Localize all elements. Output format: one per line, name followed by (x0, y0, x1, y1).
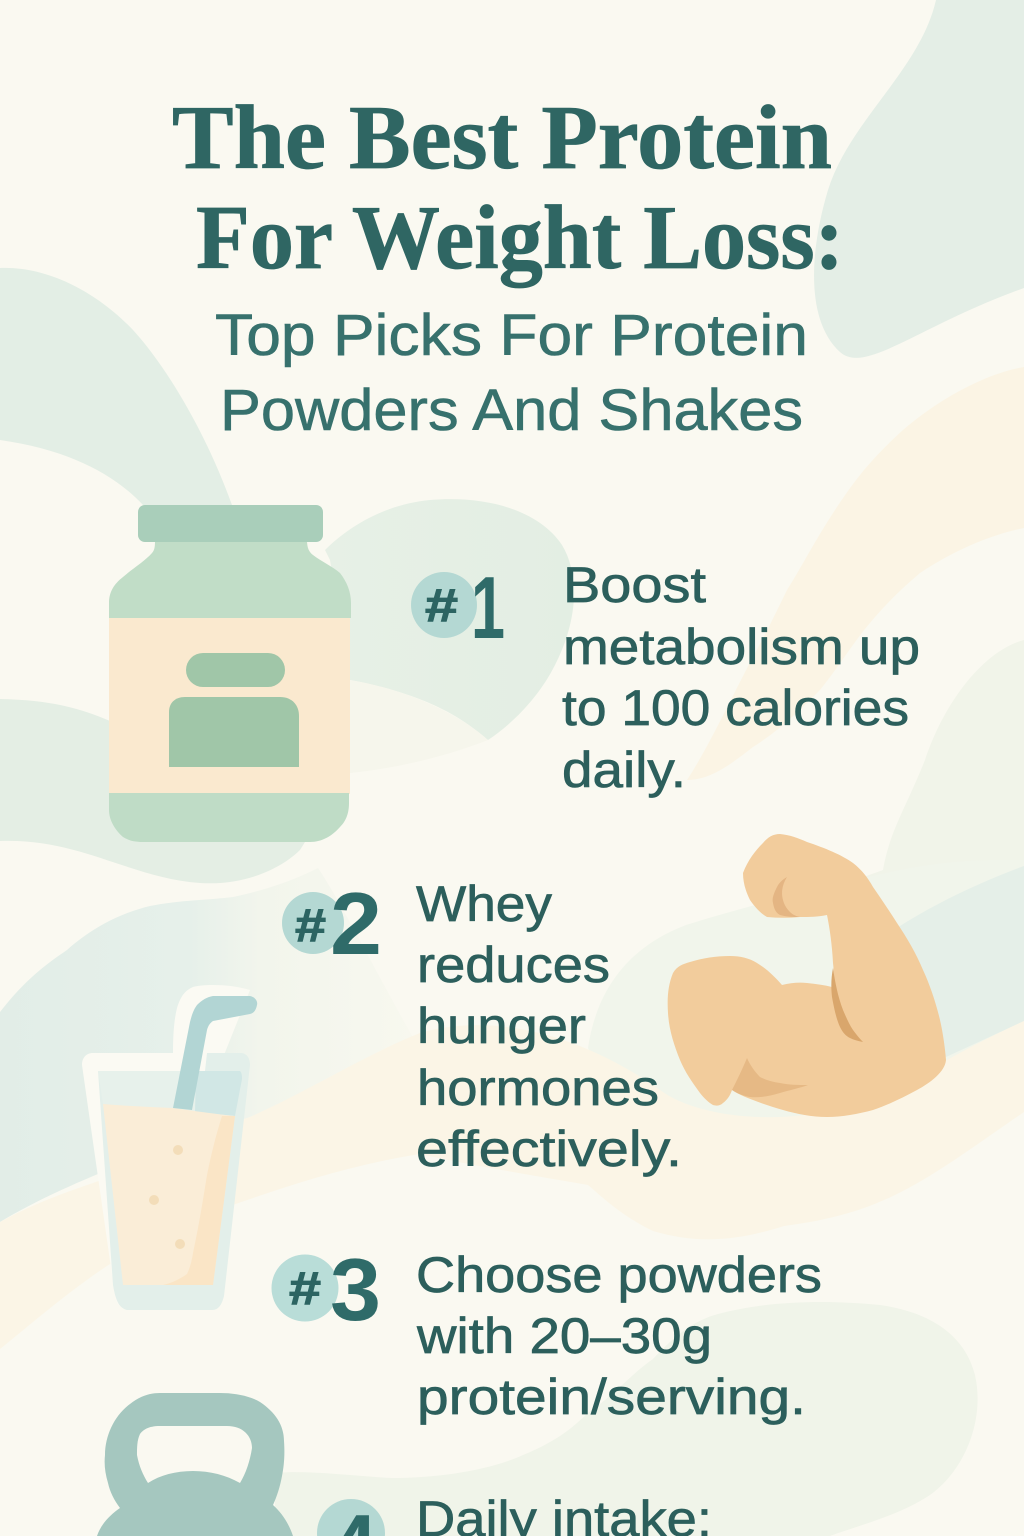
text: item 1: Boost (563, 557, 706, 613)
text: item 2: reduces (417, 937, 610, 993)
icon: protein jar (109, 505, 351, 842)
icon: shake glass (82, 985, 257, 1310)
icon: kettlebell (97, 1393, 293, 1536)
rank badge 3 (272, 1240, 381, 1339)
text: item 2: Whey (416, 876, 552, 932)
subtitle: Powders And Shakes (220, 378, 803, 443)
text: item 1 (562, 557, 920, 798)
text: item 3 (416, 1247, 822, 1425)
text: item 3: protein/serving. (417, 1369, 806, 1425)
rank badge 3: # (289, 1262, 321, 1314)
text: item 1: to 100 calories (562, 680, 909, 736)
title: The Best Protein (172, 87, 832, 188)
icon: flexed arm (668, 834, 946, 1117)
text: item 3: with 20–30g (416, 1308, 712, 1364)
rank badge 2 (282, 874, 382, 973)
title: For Weight Loss: (196, 187, 844, 288)
text: item 2: hunger (417, 998, 586, 1054)
text: item 1: metabolism up (563, 619, 920, 675)
title (172, 87, 844, 288)
rank badge 1 (411, 558, 505, 657)
rank badge 3: 3 (330, 1240, 381, 1339)
rank badge 1: # (425, 579, 458, 631)
text: item 3: Choose powders (416, 1247, 822, 1303)
rank badge 2: 2 (330, 874, 382, 973)
text: item 2: hormones (417, 1060, 659, 1116)
text: item 2 (416, 876, 682, 1177)
subtitle (215, 303, 808, 443)
text: item 2: effectively. (416, 1121, 682, 1177)
rank badge 2: # (295, 899, 326, 951)
rank badge 1: 1 (471, 558, 505, 657)
subtitle: Top Picks For Protein (215, 303, 808, 368)
text: item 1: daily. (562, 742, 686, 798)
